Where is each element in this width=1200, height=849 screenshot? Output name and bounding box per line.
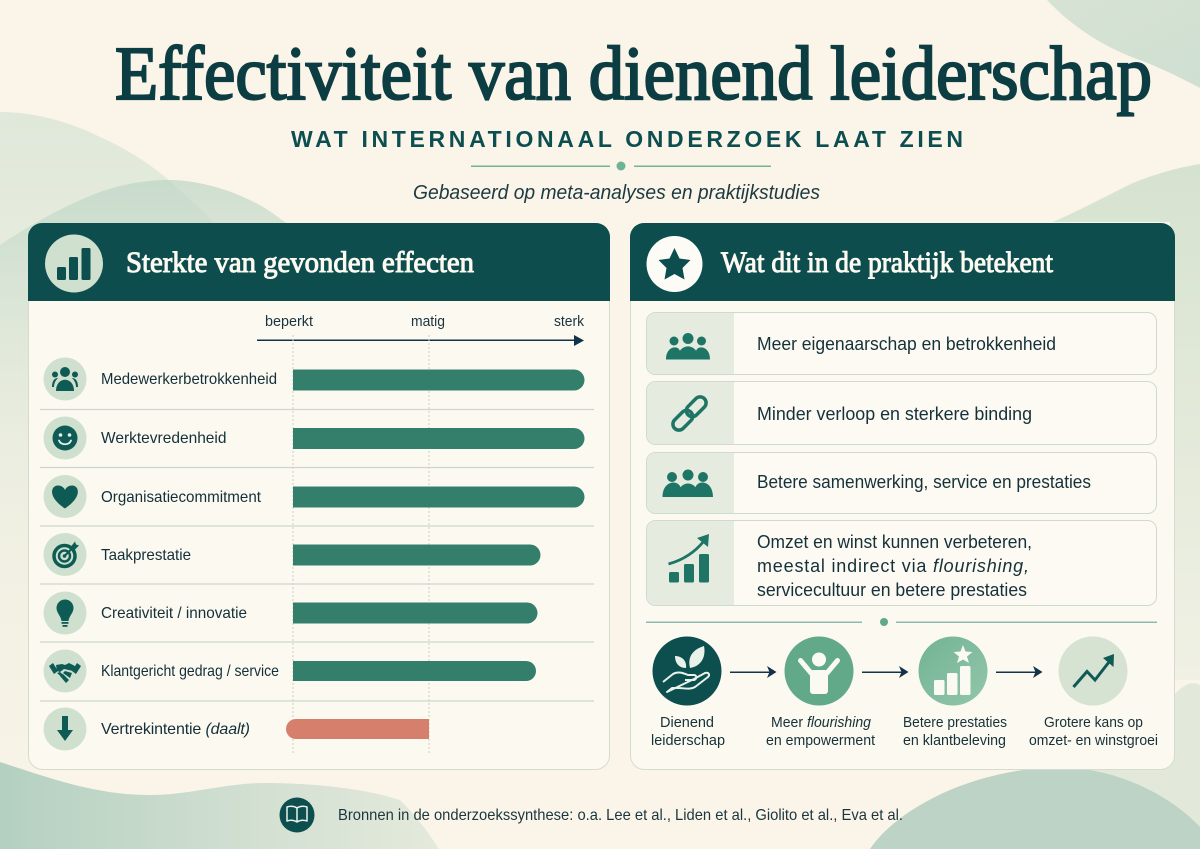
flow step: dienend leiderschap	[651, 636, 725, 749]
arrow	[862, 666, 908, 678]
icon: smiley	[44, 416, 86, 460]
icon: target	[44, 533, 86, 576]
label	[766, 715, 875, 749]
icon: bar chart	[45, 234, 103, 292]
icon: rising trend arrow	[1058, 636, 1128, 706]
bar	[293, 486, 584, 508]
icon: hand with plant	[652, 636, 722, 706]
item: eigenaarschap	[646, 312, 1156, 374]
panel heading: Sterkte van gevonden effecten	[126, 246, 474, 279]
label: Betere prestaties	[903, 715, 1007, 731]
strength axis: sterk	[554, 313, 584, 330]
item: samenwerking	[646, 452, 1156, 514]
icon: cheering person	[784, 636, 854, 706]
bar	[286, 719, 429, 739]
row: Werktevredenheid	[44, 416, 584, 460]
strength axis: matig	[411, 313, 445, 330]
icon: growth chart	[668, 534, 709, 582]
tagline: Gebaseerd op meta-analyses en praktijkstudies	[413, 182, 820, 204]
label: Dienend	[660, 715, 714, 731]
panel heading: Wat dit in de praktijk betekent	[721, 246, 1054, 279]
label: Medewerkerbetrokkenheid	[101, 371, 277, 388]
row: Creativiteit / innovatie	[44, 592, 538, 634]
icon: down arrow	[44, 708, 86, 750]
text: Minder verloop en sterkere binding	[757, 404, 1032, 424]
label: omzet- en winstgroei	[1029, 733, 1158, 749]
item: omzet en winst	[646, 520, 1156, 606]
icon: team	[666, 333, 710, 360]
icon: heart	[44, 475, 86, 518]
bar	[293, 544, 540, 566]
text: Omzet en winst kunnen verbeteren,	[757, 532, 1032, 552]
arrow	[730, 666, 776, 678]
arrow	[996, 666, 1042, 678]
label: Klantgericht gedrag / service	[101, 663, 279, 680]
icon: people	[44, 358, 86, 400]
flow step: betere prestaties	[903, 636, 1007, 749]
row: Vertrekintentie (daalt)	[44, 708, 429, 750]
icon: bars with star	[918, 636, 988, 706]
label: Meer flourishing	[771, 715, 871, 731]
label	[903, 715, 1007, 749]
text: Betere samenwerking, service en prestaties	[757, 472, 1091, 492]
row: Taakprestatie	[44, 533, 540, 576]
strength axis	[257, 313, 584, 346]
label	[651, 715, 725, 749]
row: Klantgericht gedrag / service	[44, 650, 536, 692]
panel header	[630, 223, 1175, 301]
icon: handshake	[44, 650, 86, 692]
label: Vertrekintentie (daalt)	[101, 721, 250, 738]
panel header	[28, 223, 610, 301]
panel background	[28, 224, 610, 770]
text: Meer eigenaarschap en betrokkenheid	[757, 334, 1056, 354]
item: verloop	[646, 382, 1156, 444]
label: Creativiteit / innovatie	[101, 605, 247, 622]
title: Effectiviteit van dienend leiderschap	[115, 32, 1152, 116]
bar	[293, 602, 538, 624]
strength axis: beperkt	[265, 313, 314, 330]
bar	[293, 661, 536, 681]
icon: chain link	[670, 394, 709, 433]
panel background	[630, 224, 1174, 770]
text: meestal indirect via flourishing,	[757, 556, 1029, 576]
flow step: omzet- en winstgroei	[1029, 636, 1158, 749]
label: en empowerment	[766, 733, 875, 749]
bar	[293, 428, 584, 449]
title divider with dot	[471, 162, 771, 170]
label: Grotere kans op	[1044, 715, 1143, 731]
icon: open book	[280, 798, 314, 832]
row: Medewerkerbetrokkenheid	[44, 358, 584, 400]
label: Organisatiecommitment	[101, 489, 262, 506]
source text: Bronnen in de onderzoekssynthese: o.a. Lee et al., Liden et al., Giolito et al., Eva et al.	[338, 807, 903, 824]
label	[1029, 715, 1158, 749]
flow step: flourishing	[766, 636, 875, 749]
label: en klantbeleving	[903, 733, 1006, 749]
panel: wat dit in de praktijk betekent	[630, 223, 1175, 770]
icon: team	[662, 470, 713, 497]
icon: star	[646, 236, 702, 292]
label: leiderschap	[651, 733, 725, 749]
label: Werktevredenheid	[101, 430, 226, 447]
row: Organisatiecommitment	[44, 475, 584, 518]
subtitle: WAT INTERNATIONAAL ONDERZOEK LAAT ZIEN	[291, 126, 963, 152]
bar	[293, 370, 584, 390]
text: servicecultuur en betere prestaties	[757, 580, 1027, 600]
icon: light bulb	[44, 592, 86, 634]
label: Taakprestatie	[101, 547, 191, 564]
footer sources	[280, 798, 903, 832]
panel: sterkte van gevonden effecten	[28, 223, 610, 770]
text	[757, 532, 1032, 600]
